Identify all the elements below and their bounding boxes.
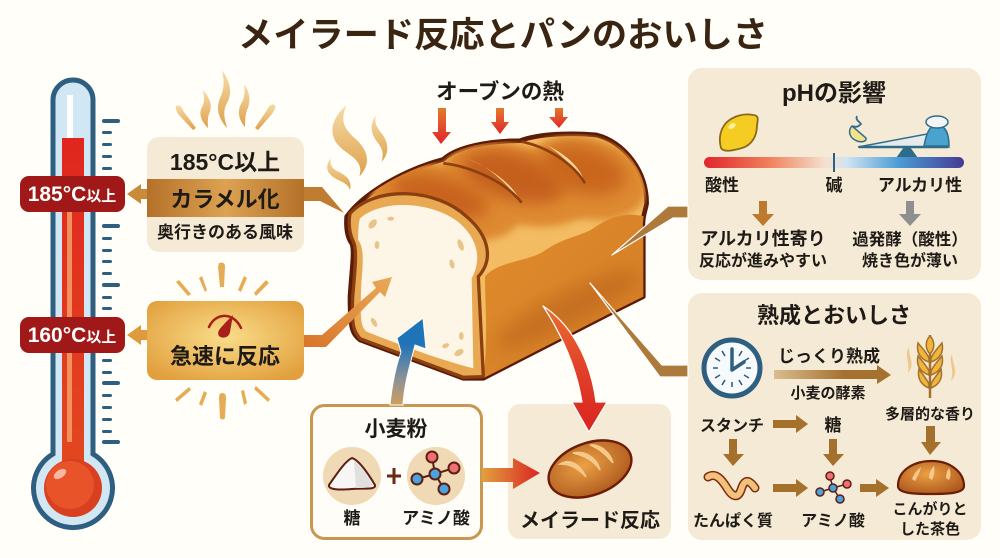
label: 160°C以上: [20, 317, 125, 353]
arrow: rapid reaction leader to bread: [304, 277, 392, 347]
arrow: slow aging: [774, 365, 891, 384]
heading: oven heat: オーブンの熱: [436, 79, 564, 104]
icon: sparkle rays around rapid reaction: [175, 263, 270, 420]
text: こんがりと: こんがりと: [892, 500, 968, 518]
icon: wheat: [907, 335, 955, 398]
text: カラメル化: カラメル化: [170, 187, 280, 212]
arrow: bread to aging panel: [590, 283, 688, 377]
panel: rapid reaction: [147, 301, 304, 380]
icon: amino acid molecule: [407, 447, 465, 505]
arrow: starch to sugar: [773, 415, 808, 433]
arrow: rapid reaction to thermometer: [127, 325, 147, 345]
arrow: flour to bread: [390, 318, 426, 405]
thermometer: [34, 80, 120, 528]
arrow: alkaline effect: [752, 201, 774, 226]
icon: lemon: [720, 114, 758, 151]
icon: balance with alkali: [850, 116, 949, 158]
illustration: bread loaf: [346, 124, 657, 380]
text: 急速に反応: 急速に反応: [170, 344, 280, 369]
panel: pH influence: [688, 68, 981, 280]
panel: Maillard reaction: [508, 404, 671, 539]
arrow: over-fermentation effect: [899, 201, 921, 226]
text: たんぱく質: たんぱく質: [693, 512, 773, 530]
icon: gauge: [209, 315, 241, 338]
icon: steam from bread: [327, 105, 387, 190]
icon: browned bread: [898, 461, 964, 494]
arrow: protein to amino: [773, 479, 808, 497]
label: 185°C以上: [20, 176, 125, 212]
text: じっくり熟成: じっくり熟成: [778, 346, 880, 366]
heading: 熟成とおいしさ: 熟成とおいしさ: [757, 303, 911, 328]
pH gradient bar: [704, 157, 964, 168]
text: 奥行きのある風味: 奥行きのある風味: [157, 223, 293, 242]
icon: protein chain: [708, 475, 755, 496]
heading: 小麦粉: 小麦粉: [364, 418, 428, 441]
text: 糖: 糖: [824, 416, 842, 435]
panel: flour: [312, 406, 482, 538]
panel: aging and flavor: [688, 293, 981, 540]
text: 小麦の酵素: 小麦の酵素: [790, 384, 866, 402]
panel: caramelization: [147, 137, 304, 252]
text: over-fermentation detail: 焼き色が薄い: [862, 251, 958, 270]
bread score marks: [443, 142, 585, 203]
arrow: amino to browning: [860, 479, 889, 497]
icon: clock: [704, 340, 760, 396]
arrow: aroma to browning: [921, 426, 941, 455]
text: した茶色: した茶色: [900, 520, 960, 538]
label: 185°C以上: 185°C以上: [28, 183, 116, 206]
icon: sugar: [323, 447, 381, 505]
arrow: starch down: [723, 439, 744, 466]
neutral marker: [833, 153, 835, 172]
text: 多層的な香り: 多層的な香り: [885, 405, 975, 423]
label: 160°C以上: 160°C以上: [28, 324, 116, 347]
text: 185°C以上: 185°C以上: [170, 149, 280, 175]
arrow: caramel leader to bread: [304, 187, 344, 213]
arrow: sugar down: [823, 439, 844, 466]
text: メイラード反応: メイラード反応: [520, 509, 660, 532]
heading: pH: pHの影響: [782, 80, 886, 107]
arrows: oven heat: [432, 108, 568, 144]
icon: amino molecule: [816, 472, 851, 503]
arrow: bread to pH panel: [612, 206, 688, 255]
arrow: flour to Maillard reaction: [482, 458, 540, 489]
text: alkaline result: アルカリ性寄り: [700, 229, 826, 249]
label: sugar: 糖: [344, 509, 360, 528]
arrow: caramelization to thermometer: [127, 184, 147, 204]
text: スタンチ: スタンチ: [700, 417, 764, 435]
title: メイラード反応とパンのおいしさ: [238, 16, 768, 55]
arrow: bread to Maillard reaction: [543, 306, 607, 432]
text: over-fermentation: 過発酵（酸性）: [852, 230, 968, 249]
thermometer scale ticks: [102, 119, 120, 444]
label: alkaline: アルカリ性: [878, 176, 962, 195]
icon: heat rays above caramel card: [176, 70, 275, 130]
text: alkaline result detail: 反応が進みやすい: [699, 251, 827, 270]
icon: baked bread: [541, 430, 639, 508]
label: amino acid: アミノ酸: [402, 509, 470, 528]
text: アミノ酸: アミノ酸: [801, 512, 865, 530]
label: acidic: 酸性: [705, 176, 739, 195]
label: neutral: 碱: [826, 176, 842, 195]
bread side: [483, 215, 647, 380]
bread front slice: [349, 194, 487, 377]
icon: plus: [387, 468, 401, 484]
